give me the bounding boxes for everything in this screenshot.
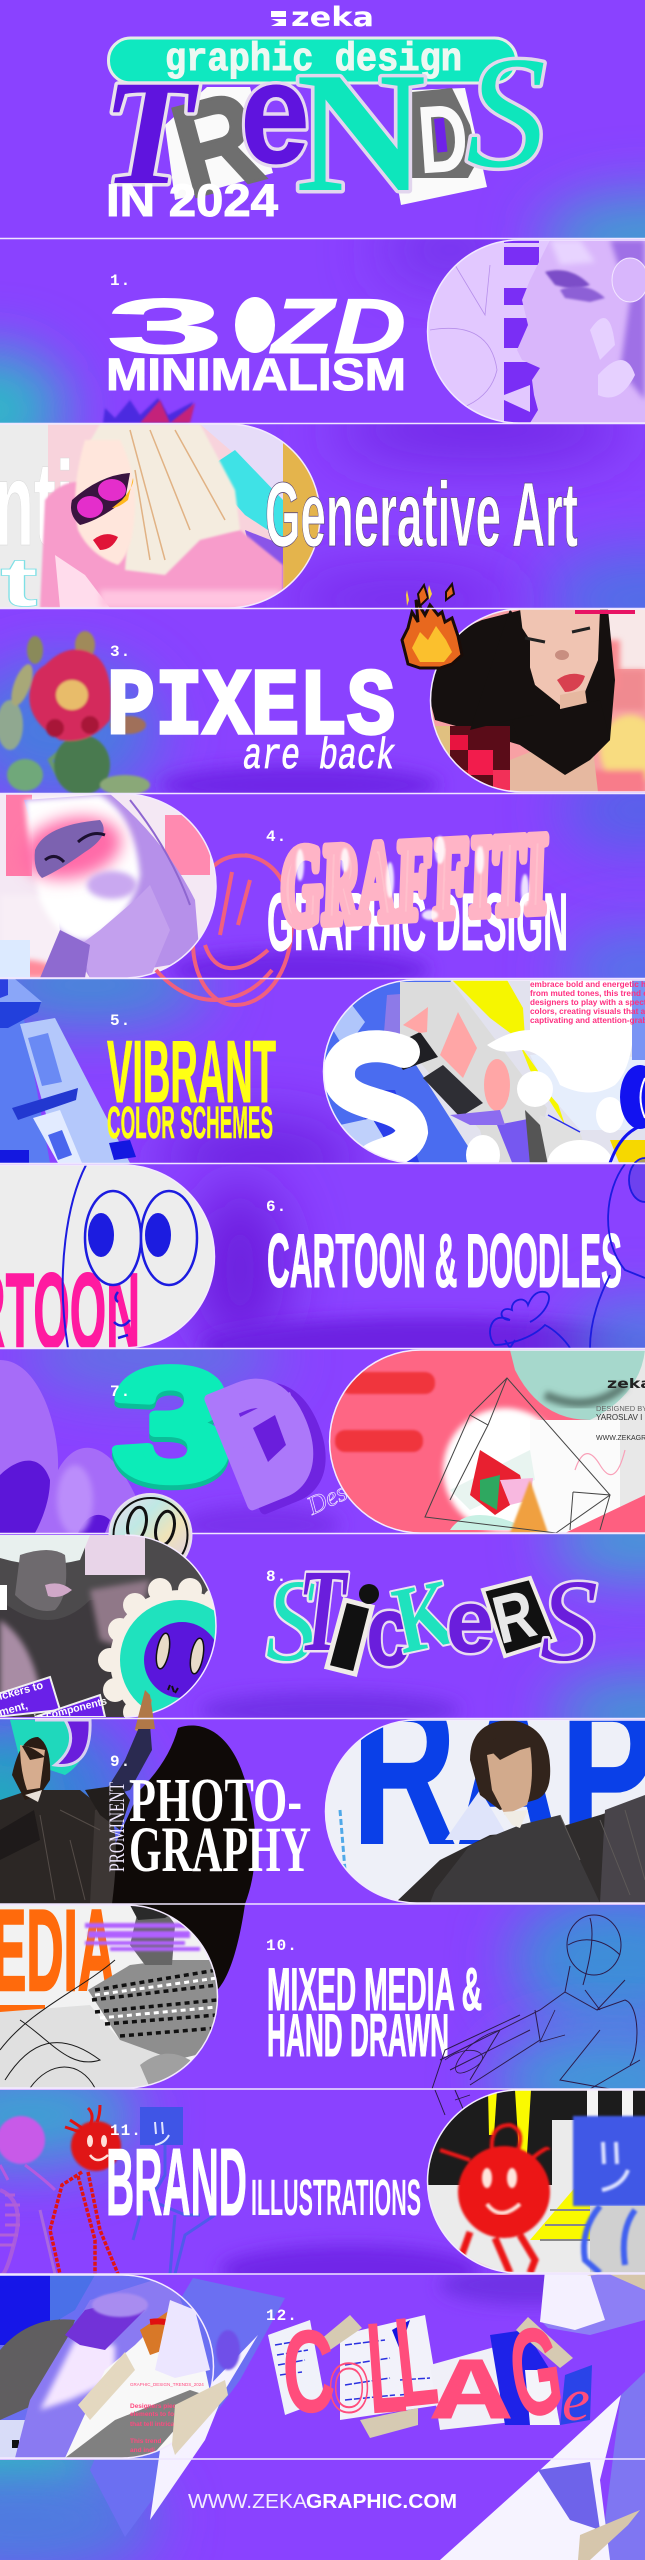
left man photo — [0, 1720, 152, 1904]
heading collage: L — [389, 2289, 444, 2435]
character pill — [0, 1164, 216, 1348]
flower illustration — [0, 631, 150, 795]
purple caption labels: in components — [33, 1695, 108, 1725]
logo and credits: WWW.ZEKAGR — [596, 1435, 645, 1442]
panel 1: 3D minimalism — [103, 240, 645, 424]
number: 11. — [110, 2122, 142, 2140]
in 2024: IN 2024 — [106, 175, 278, 226]
letter E sticker: e — [240, 31, 310, 194]
graffiti lettering — [278, 811, 552, 949]
statue collage pill: and indi — [130, 2447, 155, 2454]
heading collage: O — [328, 2349, 370, 2427]
decoration: lilac torn paper crossing bands 12 and footer — [90, 2268, 645, 2560]
footer url — [188, 2491, 457, 2513]
heading collage: L — [362, 2293, 410, 2441]
statue collage pill: Designers piece together — [130, 2403, 208, 2410]
collage pill — [0, 1534, 217, 1732]
heading collage — [268, 2289, 592, 2445]
statue collage pill — [0, 2275, 214, 2458]
panel 5: vibrant color schemes: COLOR SCHEMES — [107, 1097, 273, 1148]
3D letter 3: 3 — [113, 1337, 231, 1513]
coral doodle tail — [156, 970, 272, 1000]
heading stickers: mixed sticker letters: S — [540, 1555, 598, 1686]
subheading are back: are back — [243, 732, 395, 782]
panel 10: mixed media and hand drawn — [0, 1887, 640, 2100]
mixed media pill — [0, 1887, 217, 2095]
panel 8: stickers — [0, 1535, 598, 1735]
heading graphy: GRAPHY — [129, 1814, 311, 1886]
heading stickers: mixed sticker letters: R — [486, 1575, 543, 1659]
3D letter D: D — [188, 1336, 342, 1541]
heading collage: A — [432, 2346, 510, 2445]
paragraph — [530, 980, 645, 1025]
teal pill heading: graphic design — [165, 38, 462, 83]
portrait pill — [427, 240, 645, 424]
purple caption labels — [0, 1677, 108, 1725]
number: 12. — [266, 2307, 298, 2325]
heading stickers: mixed sticker letters: c — [366, 1575, 411, 1687]
teal scalloped sticker — [98, 1578, 250, 1730]
doodle character — [490, 1158, 645, 1348]
3D letter D: D — [200, 1340, 354, 1545]
letter T sticker: T — [102, 50, 199, 216]
statue collage pill: that tell intricate stories — [130, 2421, 204, 2428]
heading photo-: PHOTO- — [129, 1767, 302, 1835]
logo: zeka — [271, 2, 374, 33]
heading 3D: ZD — [269, 282, 406, 370]
vertical word prominent: PROMINENT — [104, 1782, 129, 1872]
heading pixels: PIXELS — [107, 656, 395, 762]
panel 2: generative art — [0, 424, 578, 621]
heading collage: C — [279, 2305, 338, 2439]
mascot pill — [427, 2090, 645, 2273]
heading stickers: mixed sticker letters: e — [446, 1572, 494, 1672]
panel 9: prominent photography — [0, 1651, 645, 2000]
footer url: WWW.ZEKA — [188, 2491, 308, 2513]
tape pieces — [172, 2380, 228, 2455]
letter D tile — [395, 84, 487, 205]
portrait pill: t — [0, 543, 38, 621]
logo and credits — [596, 1377, 645, 1442]
number: 4. — [266, 828, 287, 846]
panel 6: cartoon and doodles — [0, 1158, 645, 1371]
hand reaching band — [135, 1690, 155, 1729]
heading minimalism: MINIMALISM — [106, 349, 406, 400]
number: 5. — [110, 1012, 131, 1030]
heading stickers: mixed sticker letters: K — [385, 1558, 464, 1674]
flower tip from panel 2 — [103, 398, 195, 423]
building photo — [0, 979, 136, 1163]
panel 7: 3D — [0, 1349, 645, 1533]
3D letter 3: 3 — [113, 1342, 231, 1518]
logo: zeka: zeka — [291, 2, 374, 33]
tape — [320, 2315, 362, 2350]
number: 1. — [110, 272, 131, 290]
brand characters — [0, 2105, 215, 2275]
panel 5: vibrant color schemes: VIBRANT — [107, 1022, 276, 1121]
collage pill — [322, 979, 645, 1163]
paper scraps — [268, 2315, 592, 2430]
heading 3D — [106, 282, 406, 370]
letter N sticker: N — [296, 38, 426, 228]
letter R tile: R — [158, 62, 275, 226]
heading stickers: mixed sticker letters: S — [266, 1555, 316, 1686]
portrait pill — [0, 794, 216, 978]
3D pill — [329, 1350, 645, 1533]
heading stickers: mixed sticker letters: T — [298, 1545, 349, 1676]
number: 6. — [266, 1198, 287, 1216]
letter D tile: D — [414, 84, 472, 194]
3D purple blob — [0, 1360, 136, 1533]
wire polyhedron — [425, 1378, 610, 1533]
number: 9. — [110, 1753, 131, 1771]
statue collage pill: GRAPHIC_DESIGN_TRENDS_2024 — [130, 2382, 204, 2387]
icon: coral smiley doodle — [193, 855, 292, 1005]
icon: holographic face sticker — [110, 1494, 192, 1576]
portrait pill — [430, 609, 645, 795]
panel 5: vibrant color schemes — [0, 968, 645, 1163]
panel 11: brand illustrations: ILLUSTRATIONS — [251, 2169, 421, 2226]
logo and credits: zeka — [607, 1377, 645, 1392]
portrait pill — [0, 424, 323, 621]
statue collage pill: elements to form cohesive — [130, 2411, 212, 2418]
icon: pixel flame — [402, 584, 462, 668]
mixed media pill: EDIA — [0, 1887, 115, 2015]
panel 4: graffiti graphic design — [0, 794, 568, 1005]
number: 7. — [110, 1383, 131, 1401]
number: 8. — [266, 1568, 287, 1586]
panel 11: brand illustrations: BRAND — [106, 2129, 247, 2236]
heading collage: G — [502, 2300, 570, 2445]
heading collage: e — [562, 2367, 590, 2433]
heading stickers: mixed sticker letters — [266, 1545, 598, 1687]
heading 3D: 3 — [106, 282, 224, 370]
lilac curls — [216, 2330, 240, 2370]
panel 3: pixels are back — [0, 584, 645, 795]
logo and credits: YAROSLAV I — [596, 1413, 642, 1422]
sketch legs continuing — [435, 2090, 610, 2125]
statue collage pill: This trend — [130, 2438, 161, 2445]
black garment silhouette — [108, 1726, 255, 2000]
letter S sticker: S — [466, 23, 546, 201]
sketch figure — [432, 1915, 640, 2100]
title: graphic design trends in 2024 — [102, 23, 546, 228]
footer url: GRAPHIC.COM — [306, 2491, 457, 2513]
number: 3. — [110, 643, 131, 661]
panel 11: brand illustrations — [0, 2090, 645, 2275]
signature: Design — [302, 1463, 382, 1521]
number: 10. — [266, 1937, 298, 1955]
panel 12: collage — [0, 2275, 592, 2458]
